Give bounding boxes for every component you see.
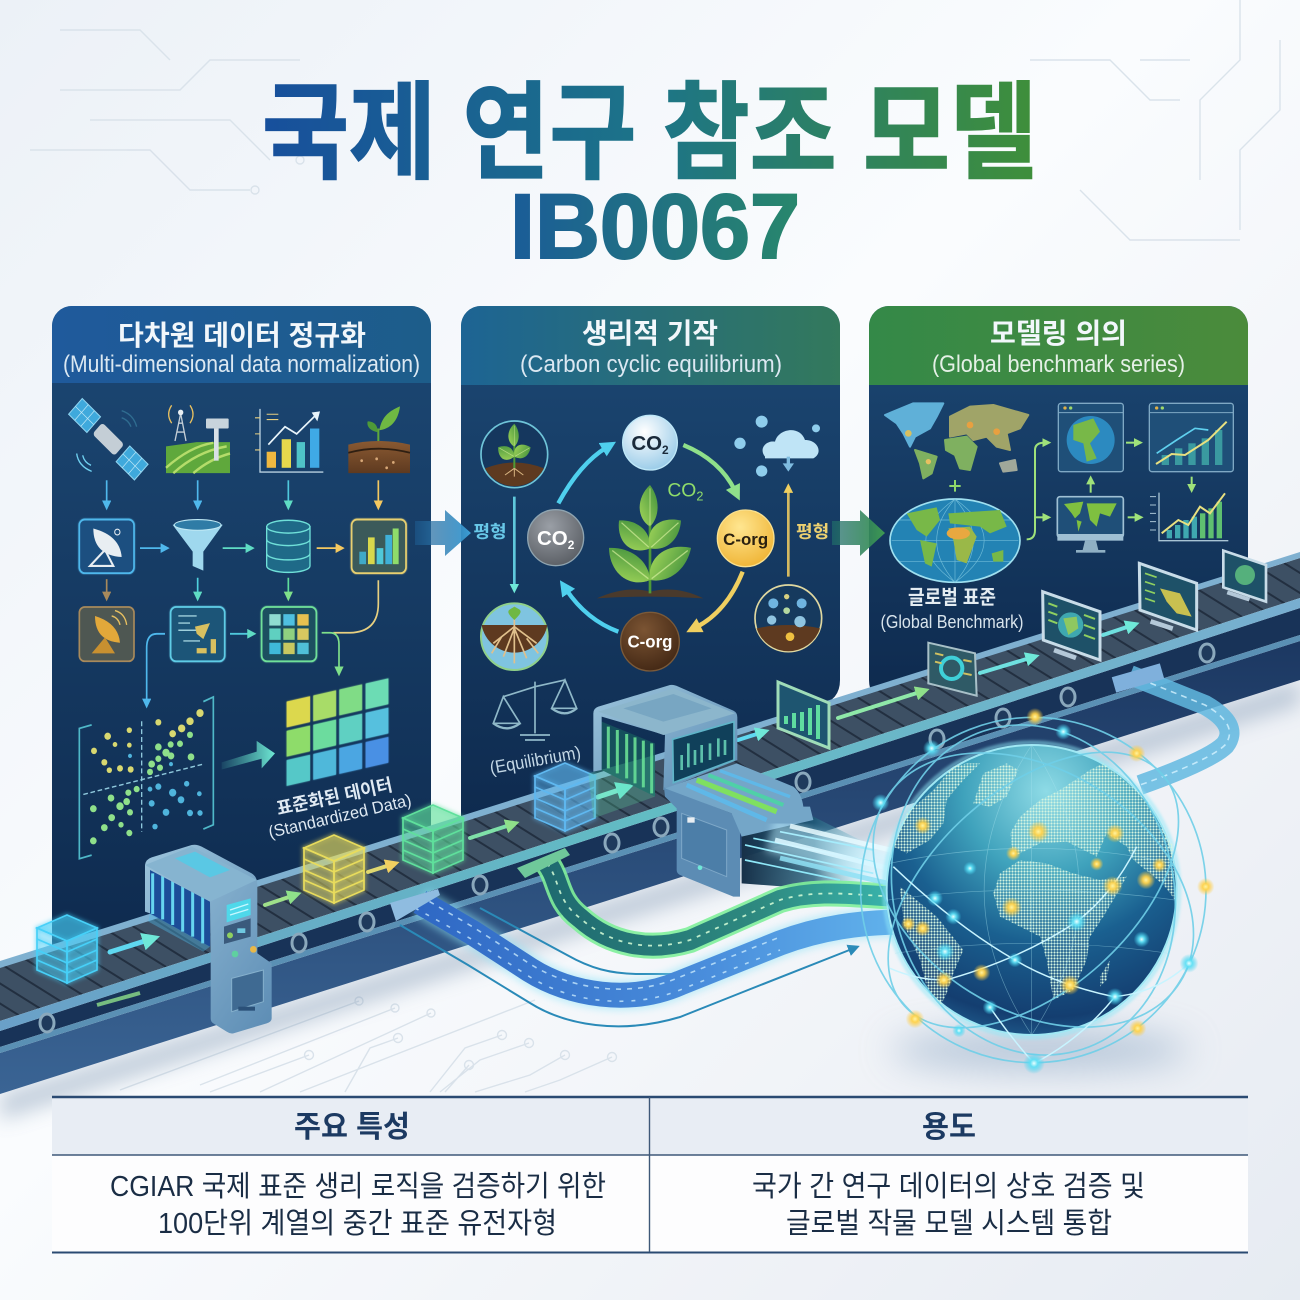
icon: growth chart	[1150, 493, 1228, 541]
icon: plus	[949, 480, 961, 492]
processing machine	[588, 685, 873, 897]
icon: monitor with map	[1057, 497, 1123, 553]
data cube: blue input	[37, 915, 97, 983]
ribbon connector: green	[517, 848, 570, 878]
arrow: panel 2 to panel 3	[832, 510, 885, 556]
map monitor on belt	[1139, 563, 1197, 631]
sphere glow	[884, 743, 1179, 1037]
machine screen	[673, 722, 734, 783]
arrows: sources to processing	[107, 480, 378, 702]
data beam: machine to globe	[770, 826, 900, 885]
title: 국제 연구 참조 모델	[262, 75, 1037, 193]
icon: balance scale	[493, 680, 577, 740]
panel: multi-dimensional data normalization	[52, 306, 431, 960]
exit opening	[742, 817, 873, 893]
table column: key properties	[110, 1111, 606, 1240]
icon: field sensor tower	[166, 405, 230, 473]
orbit rings	[823, 693, 1244, 1087]
node: CO2 top: 2	[662, 443, 669, 457]
arrow: up to cloud	[784, 490, 792, 577]
title: IB0067	[510, 176, 800, 278]
label: global benchmark: (Global Benchmark)	[880, 612, 1024, 632]
icon: chart window	[1149, 403, 1233, 472]
icon: world map	[885, 403, 1028, 478]
node: C-org right	[717, 510, 774, 567]
network links	[890, 847, 1189, 1063]
node: CO2 left: CO	[537, 527, 568, 550]
icon: data chart	[255, 409, 323, 472]
data cube: green	[403, 805, 463, 873]
icon: funnel	[173, 520, 223, 571]
thin data lines	[400, 908, 852, 1026]
table column: key properties: 100단위 계열의 중간 표준 유전자형	[158, 1207, 557, 1240]
icon: roots circle	[481, 603, 548, 670]
table column: use: 용도	[922, 1111, 976, 1144]
data ribbon: blue	[415, 896, 905, 1001]
icon: satellite	[69, 399, 148, 480]
sorter conveyor	[665, 763, 813, 837]
opening with green bars	[588, 722, 655, 818]
panel 1 header: (Multi-dimensional data normalization)	[63, 351, 420, 378]
box: brown dish	[79, 607, 134, 661]
panel 2 header: (Carbon cyclic equilibrium)	[520, 351, 782, 378]
dotted continents	[893, 763, 1175, 1007]
data ribbon: rear loop	[1112, 663, 1230, 785]
ribbon connector: blue	[390, 889, 440, 921]
box: satellite dish	[79, 520, 134, 573]
label: global benchmark: 글로벌 표준	[908, 586, 996, 609]
label: equilibrium left: 평형	[473, 521, 507, 541]
globe	[823, 693, 1244, 1087]
panel 3 header: 모델링 의의	[990, 318, 1127, 349]
standardized data grid	[287, 678, 388, 786]
label: standardized data: 표준화된 데이터	[275, 775, 394, 819]
belt monitors	[928, 551, 1266, 696]
node: C-org bottom	[621, 612, 679, 671]
machine housing	[593, 685, 737, 790]
label: equilibrium right: 평형	[796, 521, 829, 541]
label: global benchmark	[880, 586, 1024, 632]
box: map data	[171, 607, 225, 661]
sphere	[887, 745, 1177, 1035]
conveyor shadow	[0, 680, 1300, 1120]
title	[262, 75, 1037, 278]
panel 3 header: (Global benchmark series)	[932, 351, 1185, 378]
carbon cycle diagram	[473, 415, 829, 740]
chart monitor on belt	[778, 682, 829, 748]
node: C-org right: C-org	[723, 530, 768, 549]
table column: key properties: 주요 특성	[294, 1111, 410, 1144]
globe monitor on belt 3	[1223, 551, 1266, 602]
panel 2 header	[461, 306, 840, 385]
node: CO2 left	[528, 510, 584, 566]
data ribbon: green	[547, 863, 905, 946]
panel 2 header: 생리적 기작	[582, 318, 718, 349]
cycle arrows	[558, 445, 743, 632]
node: C-org bottom: C-org	[627, 632, 672, 652]
arrow: scatter to standardized grid	[222, 741, 275, 769]
table column: use	[752, 1111, 1145, 1240]
conveyor direction arrows	[110, 626, 1130, 952]
data cube: yellow	[304, 835, 364, 903]
icon: soil and sprout	[348, 406, 410, 473]
table column: key properties: CGIAR 국제 표준 생리 로직을 검증하기 위한	[110, 1170, 606, 1203]
label: equilibrium: (Equilibrium)	[488, 742, 582, 778]
label: standardized data: (Standardized Data)	[267, 791, 413, 842]
node: CO2 left: 2	[568, 538, 575, 552]
table column: use: 글로벌 작물 모델 시스템 통합	[786, 1208, 1112, 1240]
icon: seedling circle	[481, 421, 548, 488]
data cube: blue output	[535, 763, 595, 831]
icon: database	[267, 520, 310, 572]
scatter plot	[79, 697, 213, 859]
node: CO2 top: CO	[631, 432, 662, 455]
panel 3 header	[869, 306, 1248, 385]
box: bar graph	[352, 520, 406, 573]
label: CO2 green: 2	[696, 490, 703, 504]
benchmark diagram	[885, 403, 1233, 582]
scanner portal	[145, 845, 272, 1033]
label: CO2 green: CO	[667, 481, 696, 502]
box: data grid	[262, 607, 316, 661]
panel: carbon cycle	[461, 306, 840, 830]
panel: modeling significance	[869, 306, 1248, 700]
icon: central plant	[597, 485, 703, 598]
globe monitor on belt 2	[1043, 592, 1100, 660]
portal opening	[148, 868, 210, 952]
arrow: down to roots	[510, 497, 518, 587]
table column: use: 국가 간 연구 데이터의 상호 검증 및	[752, 1170, 1145, 1203]
lower cabinet	[664, 787, 740, 897]
data flow diagram	[69, 399, 410, 859]
node: CO2 top	[623, 415, 677, 470]
icon: elliptical globe	[890, 499, 1020, 582]
arrow: panel 1 to panel 2	[415, 510, 471, 556]
arrows: green flow	[1027, 443, 1192, 539]
panel 1 header: 다차원 데이터 정규화	[118, 320, 366, 351]
icon: soil particles circle	[755, 585, 822, 652]
network nodes	[872, 708, 1214, 1074]
icon: globe window	[1058, 403, 1123, 472]
globe monitor on belt 1	[928, 643, 977, 696]
globe grid lines	[888, 745, 1175, 1035]
globe shadow	[890, 1030, 1190, 1070]
table: properties and use	[52, 1097, 1248, 1252]
panel 1 header	[52, 306, 431, 383]
conveyor belt	[0, 552, 1300, 1094]
icon: cloud and bubbles	[734, 416, 820, 477]
